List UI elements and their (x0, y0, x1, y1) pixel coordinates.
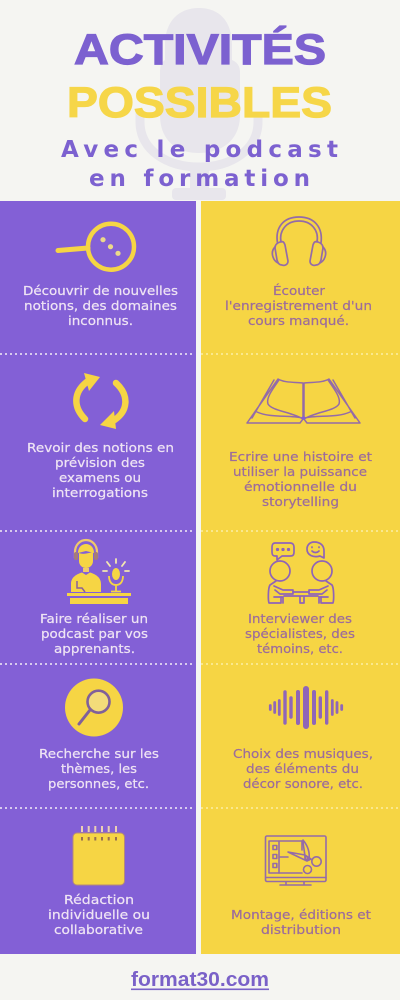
panel: listen (225, 217, 372, 328)
panel: music (233, 689, 373, 791)
text: student podcast: apprenants. (54, 641, 135, 656)
text: music: des éléments du (246, 761, 359, 776)
text: discover (23, 283, 178, 328)
text: student podcast (40, 611, 148, 656)
text: listen: Écouter (273, 283, 326, 298)
dotted row separators (1, 354, 400, 808)
icon: open book (247, 379, 360, 423)
text: review: examens ou (59, 470, 141, 485)
text: listen: cours manqué. (248, 313, 349, 328)
panel: research (39, 678, 159, 791)
text: discover: Découvrir de nouvelles (23, 283, 178, 298)
subtitle (61, 137, 338, 192)
icon: magnifier with dots (58, 224, 134, 270)
text: discover: notions, des domaines (24, 298, 177, 313)
panel: purple column (0, 201, 196, 954)
icon: monitor with scissors (266, 836, 326, 885)
icon: search magnifier in yellow disc (65, 678, 123, 736)
text: discover: inconnus. (68, 313, 133, 328)
panel: student podcast (40, 540, 148, 656)
subtitle: en formation (89, 166, 310, 192)
text: review: interrogations (52, 485, 148, 500)
text: editing (231, 907, 371, 937)
text: review: Revoir des notions en (27, 440, 174, 455)
text: writing: collaborative (54, 922, 143, 937)
text: research: Recherche sur les (39, 746, 159, 761)
text: writing: Rédaction (64, 892, 134, 907)
icon: headphones (272, 217, 326, 265)
icon: podcaster at desk (67, 540, 131, 604)
text: music: décor sonore, etc. (243, 776, 363, 791)
text: student podcast: podcast par vos (41, 626, 148, 641)
text: writing (48, 892, 150, 937)
text: listen: l'enregistrement d'un (225, 298, 372, 313)
icon: circular arrows (76, 373, 125, 429)
text: storytelling: utiliser la puissance (233, 464, 367, 479)
panel: review (27, 373, 174, 500)
text: storytelling: Ecrire une histoire et (229, 449, 372, 464)
panel: editing (231, 836, 371, 937)
text: storytelling: émotionnelle du (244, 479, 357, 494)
title (67, 26, 332, 127)
text: storytelling: storytelling (262, 494, 339, 509)
text: editing: Montage, éditions et (231, 907, 371, 922)
text: interview: spécialistes, des (245, 626, 355, 641)
text: music: Choix des musiques, (233, 746, 373, 761)
text: review: prévision des (55, 455, 145, 470)
subtitle: Avec le podcast (61, 137, 338, 163)
text: editing: distribution (261, 922, 341, 937)
text: listen (225, 283, 372, 328)
text: research: thèmes, les (61, 761, 137, 776)
icon: sound wave (270, 689, 342, 726)
icon: notepad (73, 826, 124, 885)
text: writing: individuelle ou (48, 907, 150, 922)
text: review (27, 440, 174, 500)
title: POSSIBLES (67, 79, 332, 127)
footer link: format30.com (131, 969, 269, 991)
title: ACTIVITÉS (74, 26, 326, 74)
icon: two people talking (268, 542, 334, 603)
text: interview: Interviewer des (248, 611, 352, 626)
text: interview: témoins, etc. (257, 641, 343, 656)
text: student podcast: Faire réaliser un (40, 611, 148, 626)
text: research: personnes, etc. (48, 776, 149, 791)
text: interview (245, 611, 355, 656)
panel: interview (245, 542, 355, 656)
panel: discover (23, 224, 178, 328)
panel: writing (48, 826, 150, 937)
panel: yellow column (201, 201, 400, 954)
background microphone watermark (140, 8, 258, 200)
text: research (39, 746, 159, 791)
text: music (233, 746, 373, 791)
panel: storytelling (229, 379, 372, 509)
text: storytelling (229, 449, 372, 509)
